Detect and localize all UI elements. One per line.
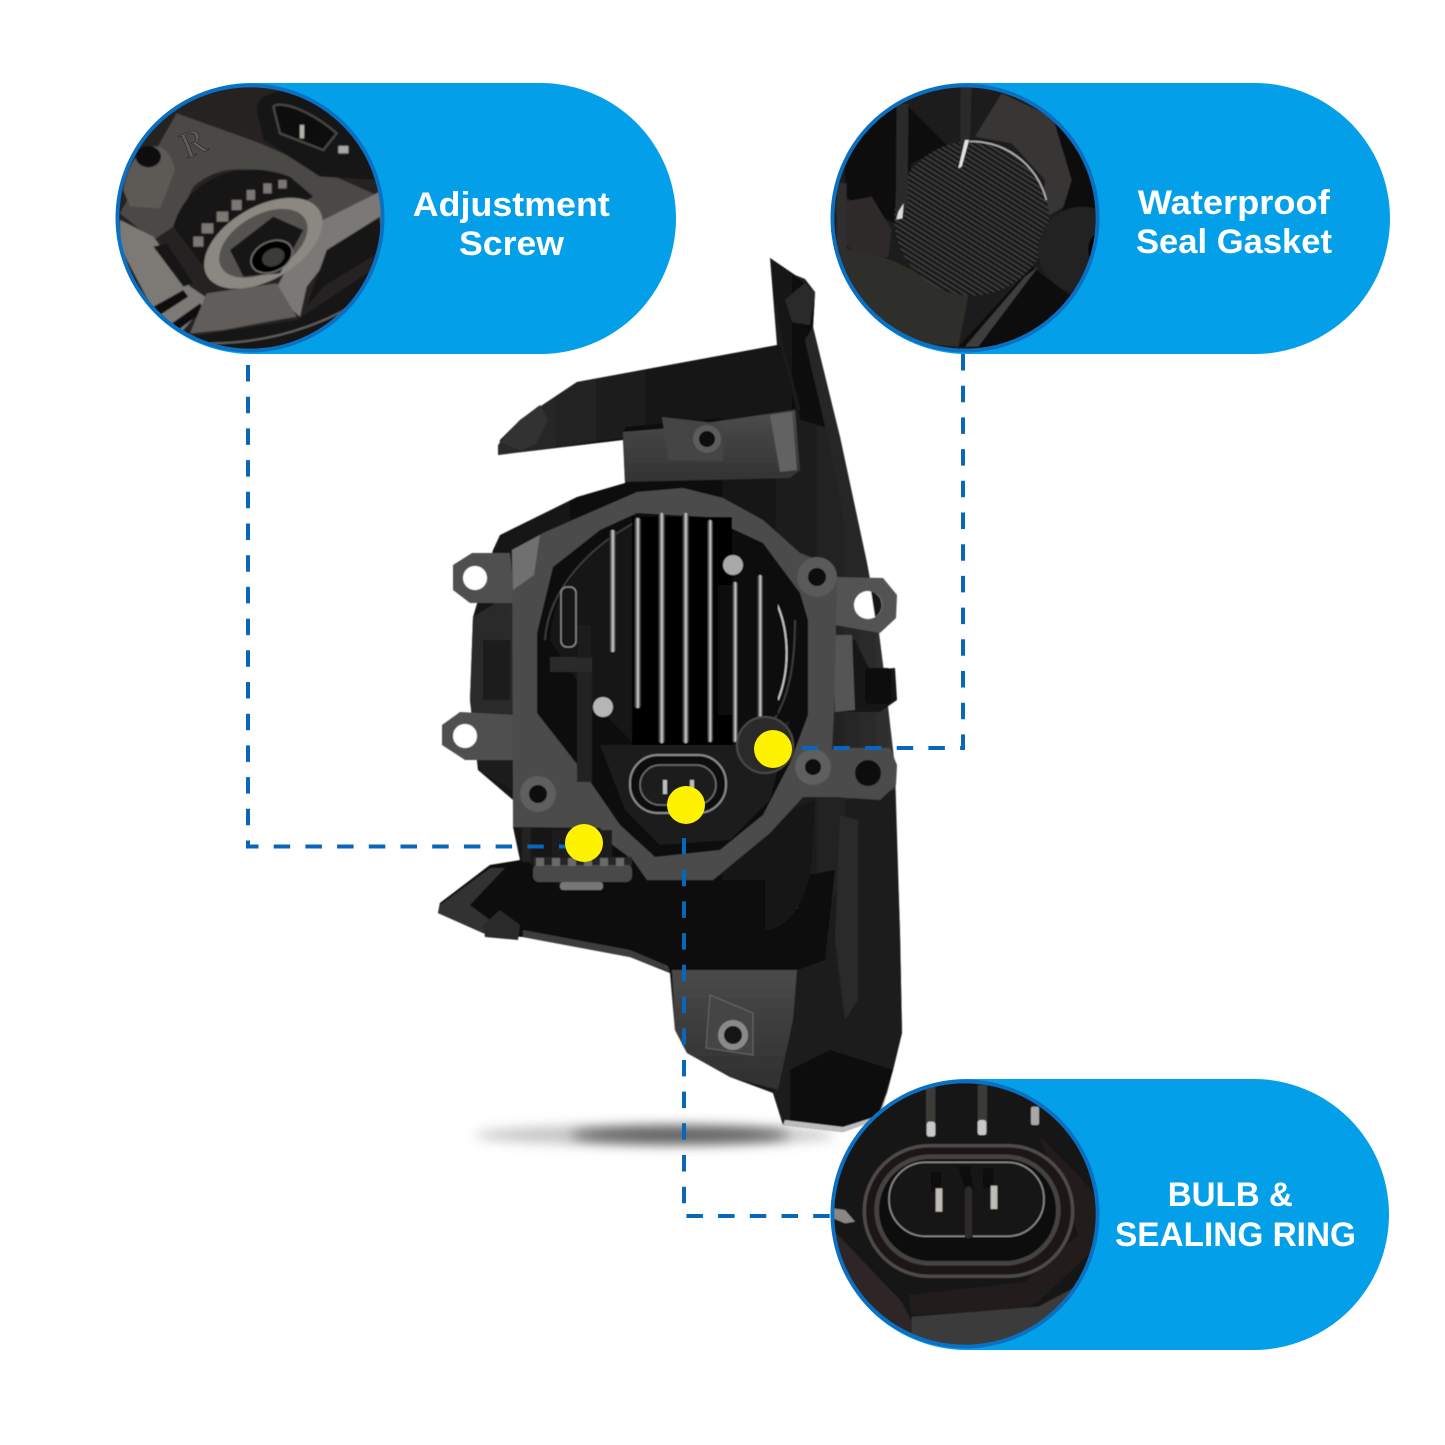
dashed line: adjustment screw xyxy=(248,365,570,846)
inner reflector xyxy=(545,520,795,845)
marker: adjustment screw xyxy=(565,824,603,862)
pill background xyxy=(831,1079,1389,1350)
ear hole: top left xyxy=(463,566,487,590)
embossed letter R: R xyxy=(174,119,213,166)
label: seal gasket: Waterproof xyxy=(1138,184,1330,222)
right rim highlight xyxy=(805,327,877,620)
ear hole: lower right xyxy=(855,760,881,786)
ear hole: top right xyxy=(854,591,882,619)
lower right body xyxy=(773,790,902,1132)
seal gasket cap xyxy=(737,717,793,773)
bracket frame xyxy=(512,488,897,880)
screw: upper xyxy=(723,555,743,575)
marker: bulb xyxy=(667,786,705,824)
dashed line: bulb and sealing ring xyxy=(684,838,832,1216)
boss: lower left xyxy=(520,776,556,812)
left body side xyxy=(470,600,512,790)
connector dashed lines xyxy=(248,354,963,1216)
photo: bulb connector xyxy=(834,1083,1096,1345)
mounting ear: top left xyxy=(453,553,515,603)
marker dots xyxy=(565,730,792,862)
bracket opening xyxy=(537,513,808,857)
photo: seal gasket xyxy=(834,87,1096,349)
label: adjustment screw: Adjustment xyxy=(413,186,610,224)
label: bulb and sealing ring: SEALING RING xyxy=(1115,1216,1356,1254)
ground shadow xyxy=(475,1125,835,1145)
boss: top right xyxy=(797,557,837,597)
ear hole: lower left xyxy=(453,724,477,748)
right connector clip xyxy=(838,640,897,712)
lower flap xyxy=(438,860,835,973)
connector socket xyxy=(630,755,726,813)
adjustment gear xyxy=(533,830,632,890)
panel: adjustment screw xyxy=(110,80,676,360)
product: fog light housing xyxy=(438,258,902,1132)
mounting ear: top right xyxy=(835,577,897,633)
infographic canvas xyxy=(116,83,1390,1350)
lens peg xyxy=(778,895,798,910)
label: bulb and sealing ring: BULB & xyxy=(1168,1176,1293,1214)
heat sink fins xyxy=(561,513,778,745)
boss: lower right xyxy=(795,749,831,785)
upper nut tab xyxy=(662,417,723,461)
housing silhouette xyxy=(438,258,902,1132)
pill background xyxy=(116,83,676,354)
adjuster bar and threaded screw xyxy=(550,625,592,782)
panel: waterproof seal gasket xyxy=(825,80,1390,360)
photo ring xyxy=(830,84,1100,352)
screw: lower xyxy=(593,697,613,717)
dashed line: seal gasket xyxy=(790,354,963,748)
lower mounting tab xyxy=(672,970,797,1090)
clip post xyxy=(522,827,531,862)
panel: bulb and sealing ring xyxy=(825,1075,1389,1355)
upper flap xyxy=(498,258,835,455)
photo ring xyxy=(830,1080,1100,1348)
upper mounting band xyxy=(623,410,800,482)
label: seal gasket: Seal Gasket xyxy=(1136,223,1332,261)
photo: adjustment screw xyxy=(119,87,381,349)
label: adjustment screw: Screw xyxy=(459,225,565,263)
photo ring xyxy=(116,84,384,352)
pill background xyxy=(831,83,1390,354)
marker: gasket xyxy=(754,730,792,768)
mounting ear: lower left xyxy=(442,712,515,760)
